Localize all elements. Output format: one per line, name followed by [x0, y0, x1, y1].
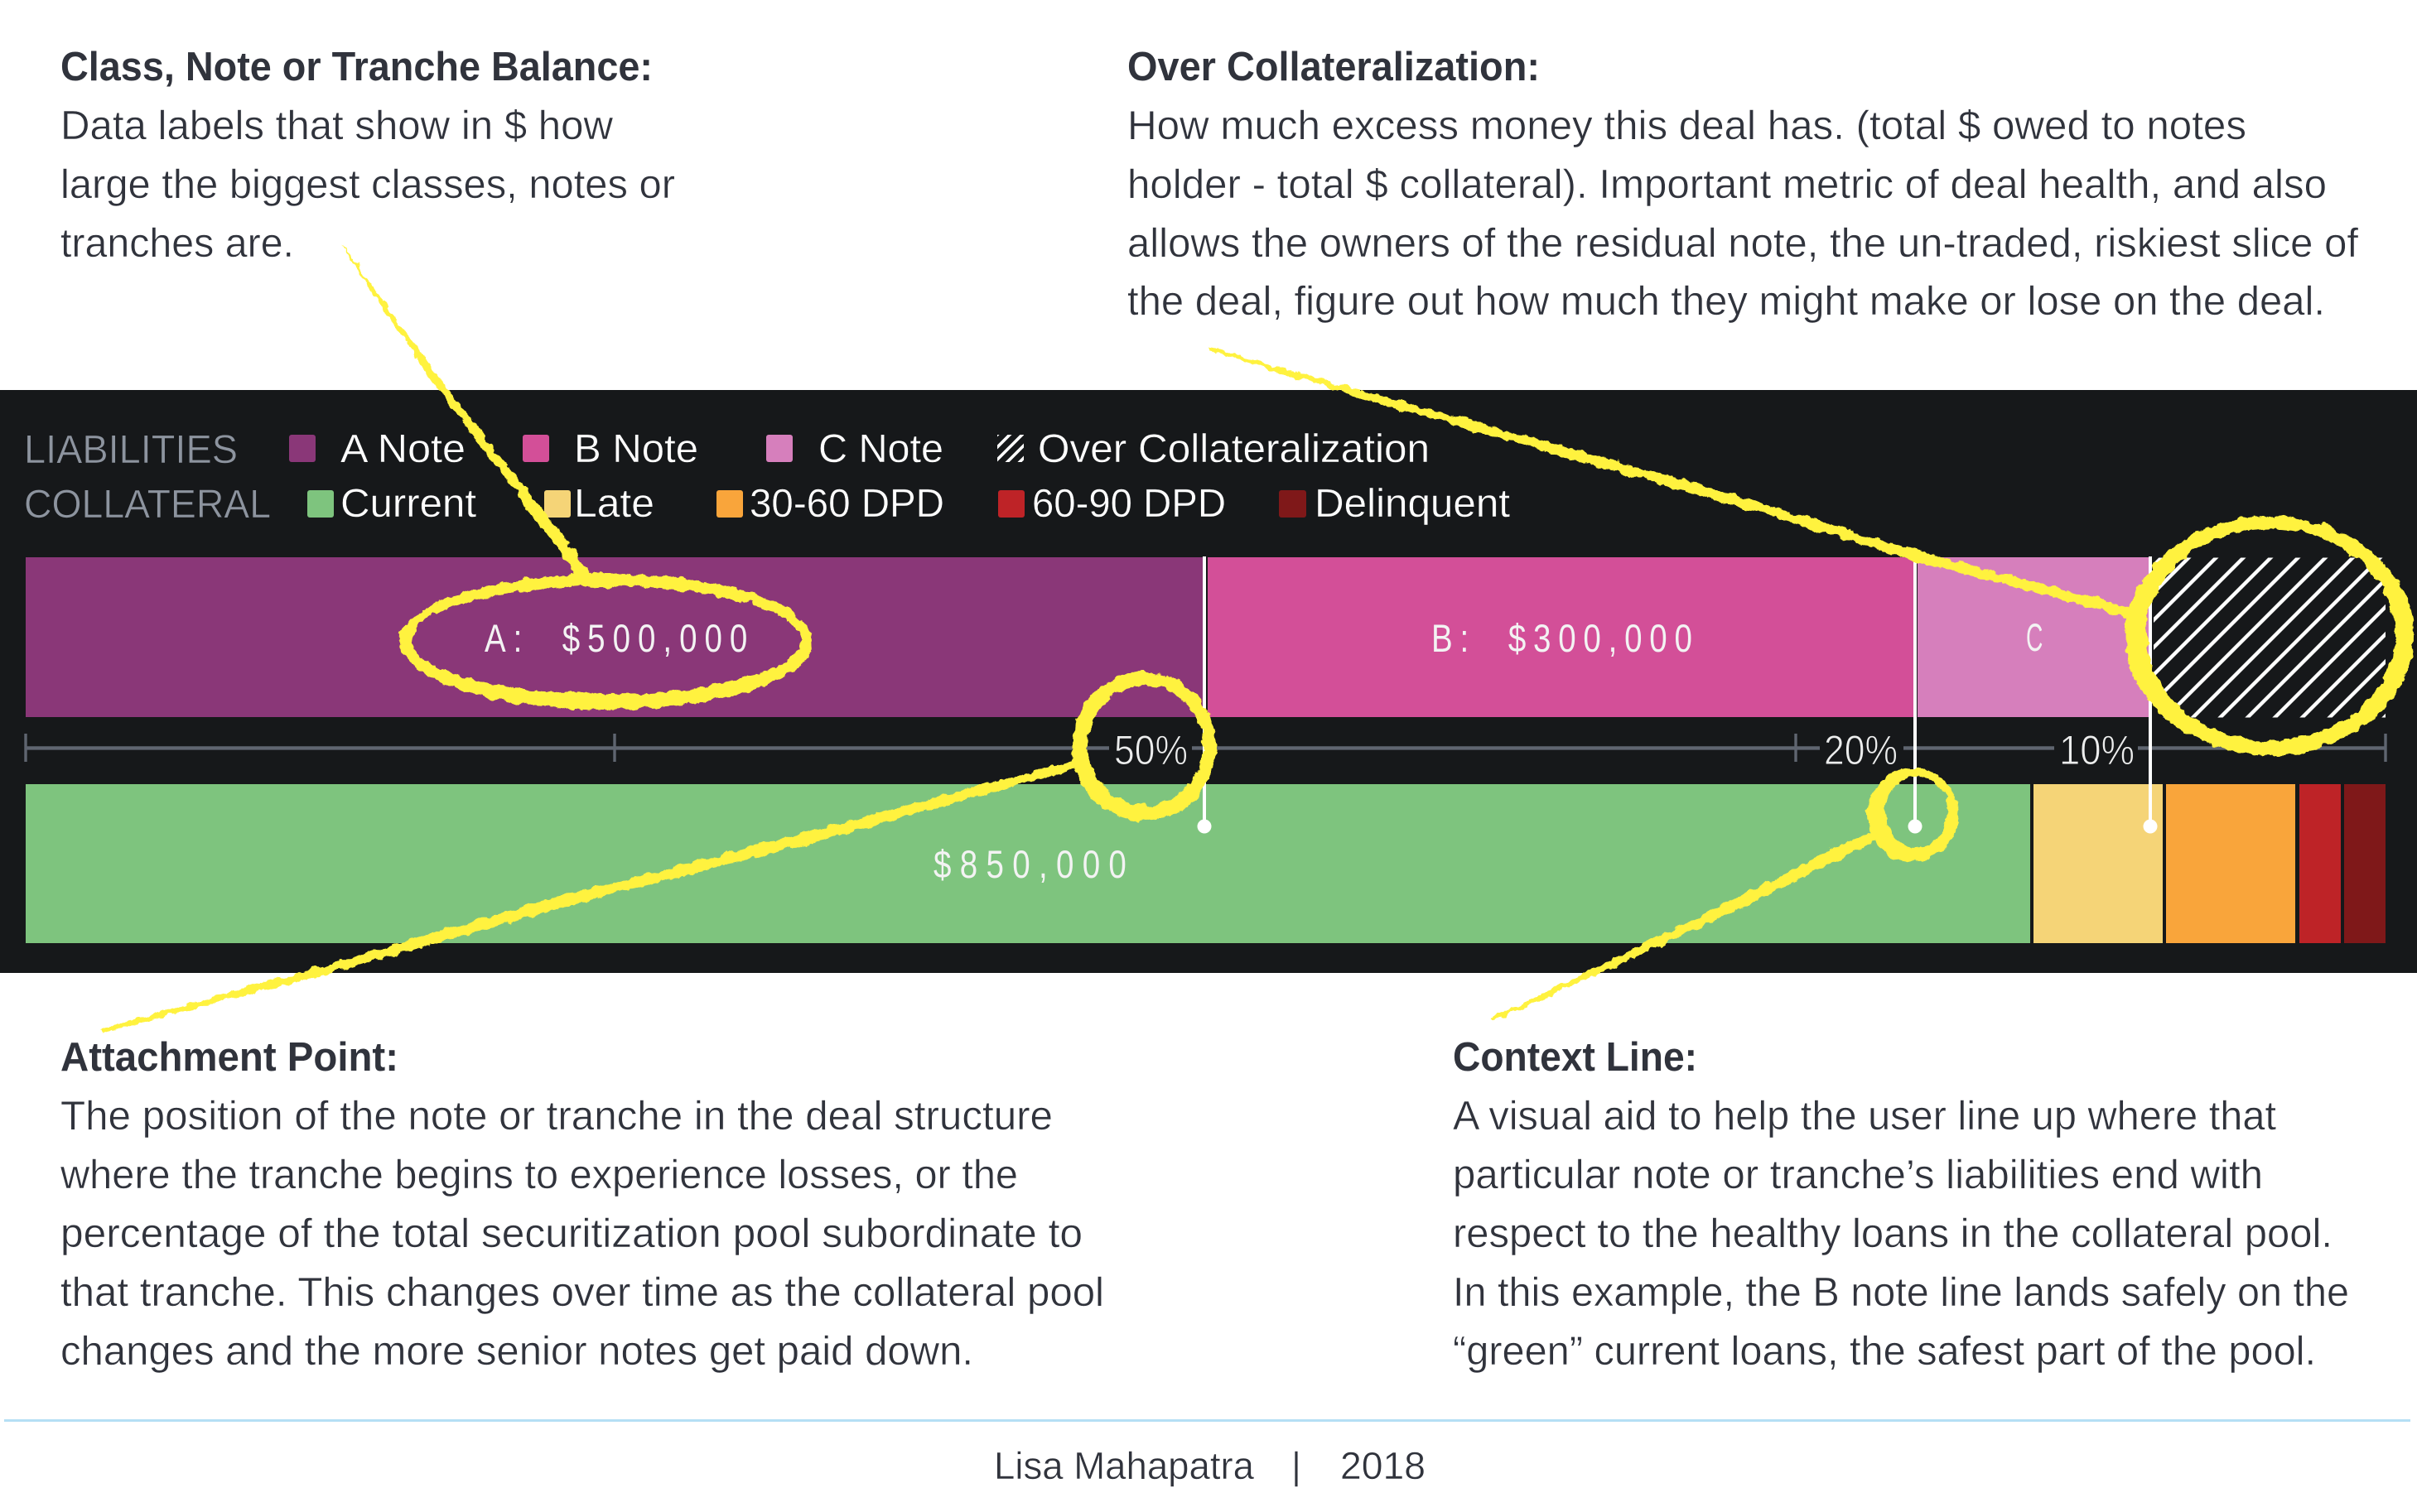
- legend row: collateral: [24, 482, 1510, 527]
- legend row: liabilities: LIABILITIES: [24, 428, 238, 472]
- label: 20%: 20%: [1824, 727, 1898, 773]
- heading: Context Line:: [1453, 1035, 1697, 1080]
- label: 10%: 10%: [2059, 727, 2135, 773]
- text block: class, note or tranche balance: [60, 45, 675, 266]
- body text: respect to the healthy loans in the collateral pool.: [1453, 1211, 2333, 1256]
- A note segment: A: $500,000: [485, 617, 747, 661]
- body text: In this example, the B note line lands safely on the: [1453, 1270, 2349, 1315]
- delinquent segment: [2344, 784, 2386, 943]
- legend row: liabilities: [24, 427, 1430, 472]
- body text: The position of the note or tranche in the deal structure: [60, 1094, 1053, 1139]
- late segment: [2033, 784, 2163, 943]
- text block: over collateralization: [1127, 45, 2358, 324]
- B note segment: [1208, 557, 1913, 717]
- body text: percentage of the total securitization pool subordinate to: [60, 1211, 1083, 1256]
- heading: Class, Note or Tranche Balance:: [60, 45, 653, 89]
- legend row: liabilities: B Note: [574, 427, 698, 471]
- year: 2018: [1340, 1444, 1426, 1487]
- body text: [1127, 104, 2358, 324]
- percentage scale axis: [26, 727, 2386, 773]
- body text: tranches are.: [60, 221, 294, 266]
- C note segment: [1918, 557, 2149, 717]
- body text: [60, 1094, 1104, 1374]
- current loans segment: $850,000: [934, 843, 1126, 887]
- over collateralization hatched segment: [2154, 558, 2386, 717]
- text block: attachment point: [60, 1035, 1104, 1374]
- heading: Over Collateralization:: [1127, 45, 1540, 89]
- legend row: liabilities: C Note: [818, 427, 943, 471]
- footer: [4, 1419, 2410, 1487]
- legend row: collateral: Late: [574, 482, 654, 526]
- body text: “green” current loans, the safest part of the pool.: [1453, 1329, 2316, 1374]
- footer: |: [1291, 1444, 1301, 1487]
- current loans segment: [26, 784, 2030, 943]
- legend row: liabilities: Over Collateralization: [1038, 427, 1430, 471]
- body text: [1453, 1094, 2349, 1374]
- body text: the deal, figure out how much they might make or lose on the deal.: [1127, 279, 2325, 324]
- body text: changes and the more senior notes get paid down.: [60, 1329, 973, 1374]
- body text: particular note or tranche’s liabilities end with: [1453, 1153, 2263, 1197]
- body text: that tranche. This changes over time as the collateral pool: [60, 1270, 1104, 1315]
- body text: Data labels that show in $ how: [60, 104, 614, 148]
- context lines: [1198, 556, 2157, 833]
- annotations: yellow hand-drawn marks: [99, 245, 2414, 1033]
- legend row: collateral: 60-90 DPD: [1032, 482, 1226, 526]
- body text: [60, 104, 675, 266]
- body text: large the biggest classes, notes or: [60, 162, 675, 207]
- annotation: context line circle and leader: [1491, 768, 1958, 1022]
- text block: context line: [1453, 1035, 2349, 1374]
- context line: A note: [1198, 556, 1211, 833]
- body text: How much excess money this deal has. (total $ owed to notes: [1127, 104, 2246, 148]
- legend row: collateral: 30-60 DPD: [750, 482, 944, 526]
- panel: dark chart: [0, 390, 2417, 973]
- legend: [24, 427, 1510, 527]
- legend row: collateral: COLLATERAL: [24, 483, 271, 527]
- liabilities bar: [26, 557, 2386, 717]
- legend row: liabilities: A Note: [340, 427, 466, 471]
- body text: holder - total $ collateral). Important metric of deal health, and also: [1127, 162, 2327, 207]
- heading: Attachment Point:: [60, 1035, 398, 1080]
- body text: A visual aid to help the user line up where that: [1453, 1094, 2276, 1139]
- 60-90 DPD segment: [2299, 784, 2341, 943]
- annotation: attachment point circle and leader: [99, 672, 1216, 1033]
- A note segment: [26, 557, 1203, 717]
- annotation: over collateralization circle and leader: [1209, 347, 2414, 755]
- body text: where the tranche begins to experience losses, or the: [60, 1153, 1018, 1197]
- B note segment: B: $300,000: [1431, 617, 1692, 661]
- C note segment: C: [2026, 617, 2043, 660]
- 30-60 DPD segment: [2166, 784, 2295, 943]
- legend row: collateral: Current: [340, 482, 476, 526]
- collateral bar: [26, 784, 2386, 943]
- annotation: balance label ellipse and leader: [343, 245, 813, 710]
- legend row: collateral: Delinquent: [1315, 482, 1510, 526]
- body text: allows the owners of the residual note, the un-traded, riskiest slice of: [1127, 221, 2358, 266]
- label: 50%: 50%: [1114, 727, 1188, 773]
- context line: C note: [2144, 556, 2157, 833]
- context line: B note: [1908, 556, 1922, 833]
- author credit: Lisa Mahapatra: [994, 1444, 1254, 1487]
